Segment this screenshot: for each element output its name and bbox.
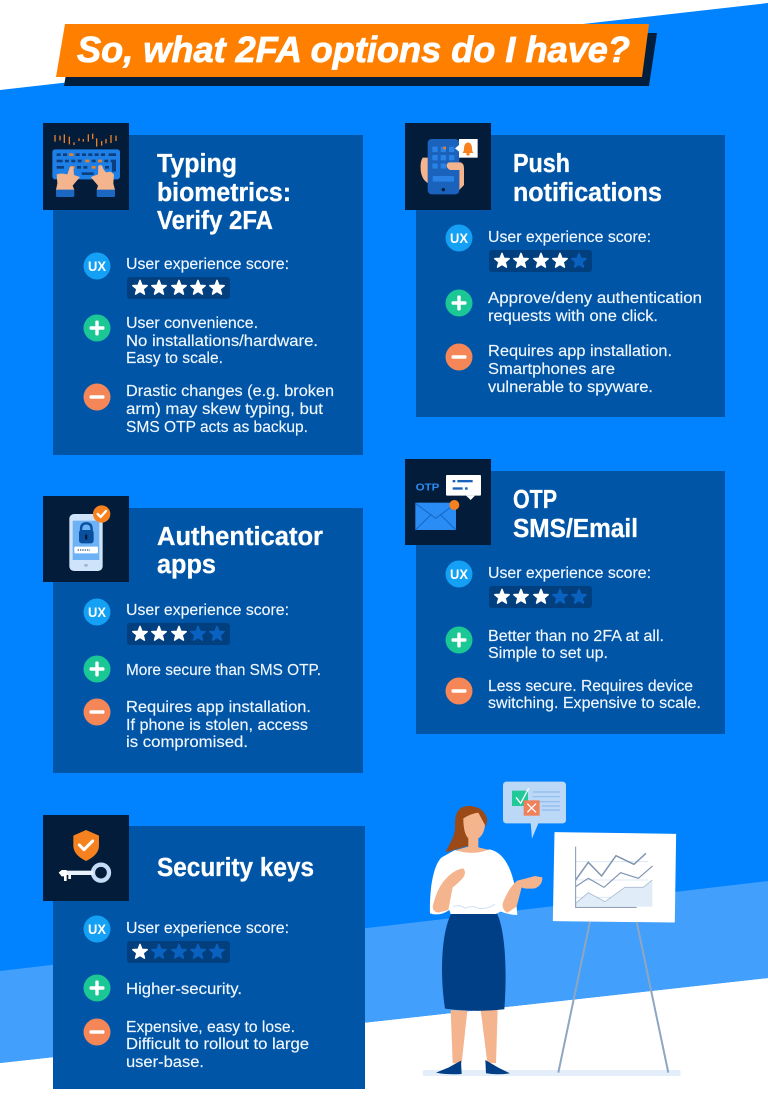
title banner [56,24,657,86]
heading: SMS/Email [513,515,638,543]
illustration: presenter with chart board [423,782,681,1076]
pros: Simple to set up. [488,645,608,662]
cons: arm) may skew typing, but [126,401,324,418]
UX score: 3 of 5 stars: UX [88,604,107,620]
UX score: 5 of 5 stars [84,252,289,299]
cons [84,698,311,751]
heading: Authenticator [157,523,323,551]
cons: is compromised. [126,734,248,751]
UX score: 3 of 5 stars: User experience score: [488,565,651,582]
cons [446,343,672,396]
heading [513,150,662,207]
heading: notifications [513,179,662,207]
cons: If phone is stolen, access [126,717,308,734]
cons: Drastic changes (e.g. broken [126,383,334,400]
heading: apps [157,551,216,579]
icon: shield and key [43,815,129,901]
cons: Smartphones are [488,361,615,378]
UX score: 4 of 5 stars [446,224,651,272]
pros: More secure than SMS OTP. [126,662,321,679]
UX score: 4 of 5 stars: UX [450,230,469,246]
pros: No installations/hardware. [126,333,318,350]
pros: Easy to scale. [126,350,223,367]
panel: authenticator apps [43,496,363,773]
heading [157,150,291,235]
icon: keyboard with hands [43,123,129,210]
woman presenter [430,806,542,1074]
heading: Typing [157,150,237,178]
pros: requests with one click. [488,308,658,325]
pros: Better than no 2FA at all. [488,628,664,645]
pros [446,626,664,662]
UX score: 1 of 5 stars: UX [88,921,107,937]
pros: Higher-security. [126,981,242,998]
pros [446,290,702,325]
panel: typing biometrics [43,123,363,455]
heading: Security keys [157,854,314,882]
pros [84,314,318,367]
UX score: 3 of 5 stars [84,598,289,645]
title banner: So, what 2FA options do I have? [77,29,630,70]
cons: Requires app installation. [126,699,311,716]
cons: vulnerable to spyware. [488,379,653,396]
cons: user-base. [126,1054,204,1071]
cons: Requires app installation. [488,343,672,360]
heading: Verify 2FA [157,207,273,235]
cons: Expensive, easy to lose. [126,1019,295,1036]
UX score: 1 of 5 stars [84,916,289,963]
cons: SMS OTP acts as backup. [126,419,308,436]
pros: User convenience. [126,315,258,332]
heading: biometrics: [157,179,291,207]
UX score: 5 of 5 stars: UX [88,258,107,274]
pros [84,974,242,1002]
icon: phone with bell notification [405,123,491,210]
heading [513,486,638,543]
UX score: 3 of 5 stars [446,560,651,608]
panel: push notifications [405,123,725,417]
easel and chart board [553,833,676,1073]
cons: switching. Expensive to scale. [488,695,701,712]
UX score: 3 of 5 stars: User experience score: [126,602,289,619]
pros [84,656,321,682]
cons: Difficult to rollout to large [126,1036,309,1053]
heading [157,523,323,579]
cons [84,383,334,436]
cons [84,1018,309,1071]
speech bubble with check and cross [503,782,566,839]
panel: security keys [43,815,365,1089]
UX score: 4 of 5 stars: User experience score: [488,229,651,246]
cons: Less secure. Requires device [488,678,693,695]
heading: OTP [513,486,557,514]
icon: OTP envelope and message [405,459,491,545]
heading: Push [513,150,570,178]
icon: OTP envelope and message: OTP [416,483,440,494]
UX score: 1 of 5 stars: User experience score: [126,920,289,937]
cons [446,678,701,712]
panel: OTP SMS/Email [405,459,725,734]
icon: phone with padlock [43,496,129,582]
UX score: 3 of 5 stars: UX [450,566,469,582]
UX score: 5 of 5 stars: User experience score: [126,256,289,273]
pros: Approve/deny authentication [488,290,702,307]
